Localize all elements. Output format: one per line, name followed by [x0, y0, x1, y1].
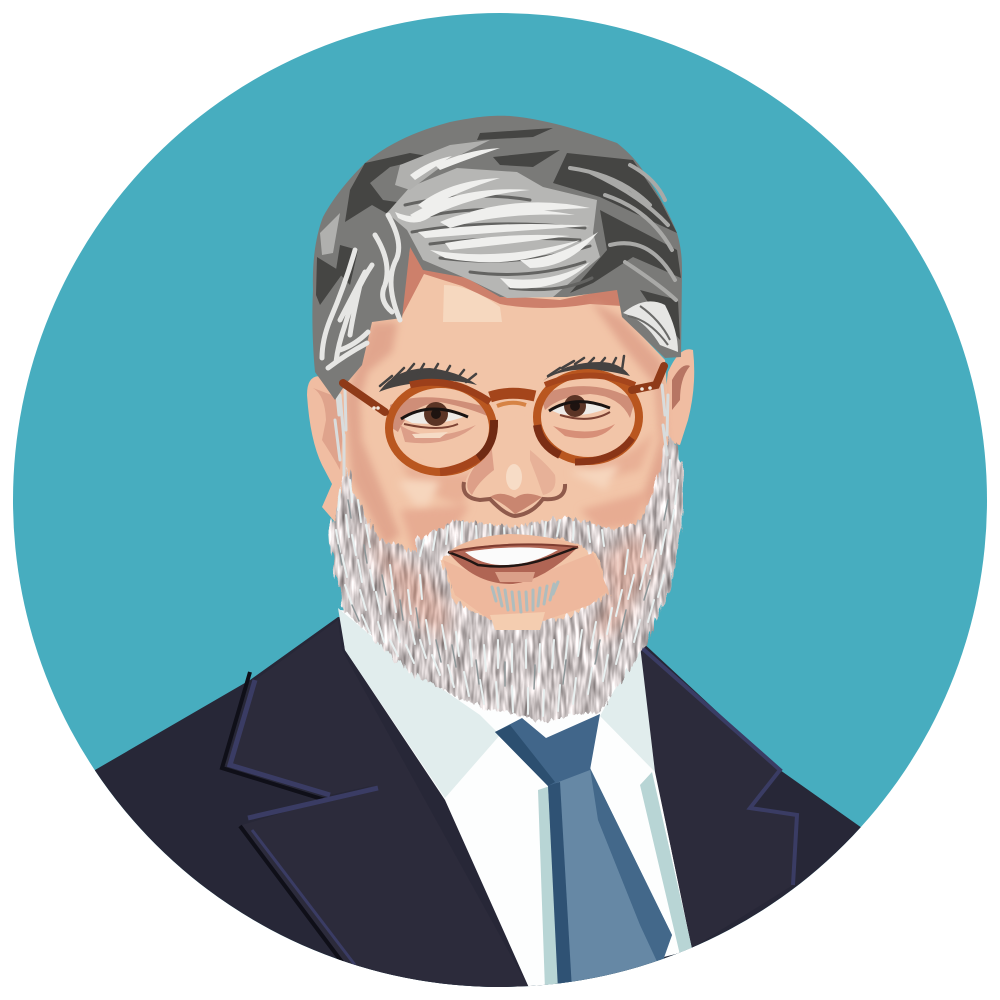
- cheek shading: [398, 430, 655, 555]
- nose: [464, 415, 565, 516]
- lower right light hair: [623, 301, 678, 352]
- beard: [330, 430, 685, 722]
- beard light hairs: [336, 460, 678, 716]
- beard dark hairs: [338, 500, 668, 689]
- right lapel: [640, 645, 797, 948]
- central light hair mass: [387, 168, 600, 298]
- chin warm patch: [490, 612, 545, 630]
- forehead highlight: [443, 285, 502, 322]
- eyebrows: [379, 356, 630, 392]
- beard mass: [330, 430, 685, 722]
- hair base: [312, 116, 682, 400]
- right eye: [540, 386, 635, 438]
- beard warm tint: [360, 520, 655, 640]
- left hair light strands: [322, 215, 400, 368]
- sideburn strands: [335, 385, 668, 475]
- left temple and hinge: [343, 383, 385, 412]
- left eyebrow: [379, 364, 477, 392]
- upper left grey patch: [320, 140, 490, 255]
- left lapel: [220, 672, 528, 987]
- cheek highlights: [398, 465, 620, 505]
- left collar: [338, 608, 500, 798]
- head: [307, 116, 694, 722]
- mouth: [448, 534, 582, 584]
- left ear: [307, 376, 355, 522]
- shirt body: [340, 610, 692, 990]
- chin and mouth surround: [443, 553, 608, 622]
- tie: [495, 714, 672, 1000]
- right lens frame: [537, 373, 639, 461]
- hair: [312, 116, 682, 400]
- left eye: [390, 397, 492, 443]
- right ear: [660, 349, 694, 445]
- light hair leaves: [395, 148, 598, 288]
- suit and shirt: [95, 608, 862, 1000]
- face: [340, 250, 672, 660]
- glasses: [343, 366, 664, 472]
- right temple and hinge: [632, 366, 664, 390]
- dark hair patches: [316, 128, 681, 340]
- hairline shadow: [400, 247, 622, 320]
- right hair strands: [570, 165, 676, 300]
- left lens frame: [389, 384, 493, 472]
- shirt shadow strips: [538, 772, 692, 990]
- dark strand details: [405, 196, 592, 290]
- right eyebrow: [543, 356, 630, 381]
- rosy skin sides: [344, 300, 668, 545]
- right collar: [600, 640, 655, 772]
- suit jacket: [95, 617, 862, 1000]
- goatee: [492, 582, 558, 612]
- bridge: [490, 393, 535, 397]
